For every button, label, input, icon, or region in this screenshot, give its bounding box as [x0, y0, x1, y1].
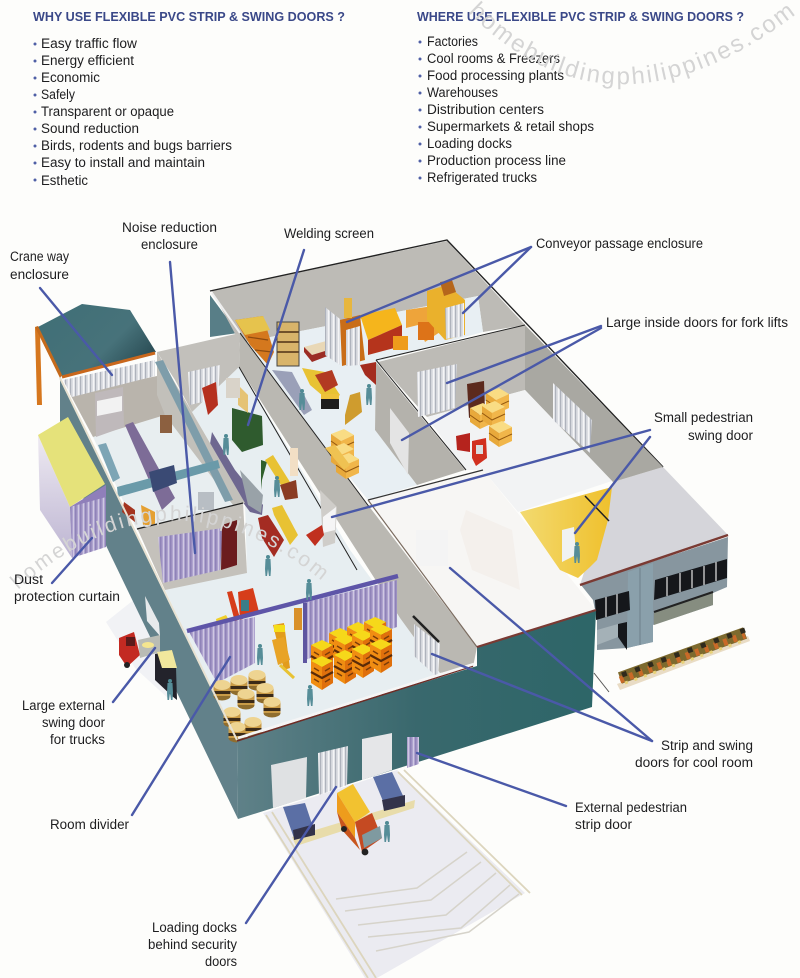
- callout: dust protection curtain: Dust: [14, 572, 43, 587]
- crane room floor: [93, 415, 235, 530]
- front wall: [237, 610, 596, 819]
- callout: small pedestrian swing door: swing door: [688, 428, 753, 443]
- curtain: inner room side: [553, 383, 592, 453]
- crane way strip curtain: [63, 360, 155, 397]
- callout: conveyor passage enclosure: [347, 236, 703, 322]
- long wall: [239, 333, 477, 673]
- callout: large inside doors: [402, 315, 788, 440]
- callout: large external swing door: [22, 648, 155, 747]
- security door 3: [362, 733, 392, 780]
- list: where use: Refrigerated trucks: [427, 170, 537, 185]
- door in enclosure: [221, 520, 237, 570]
- pavement line by office: [594, 673, 609, 692]
- callout: small pedestrian swing door: Small pedestrian: [654, 410, 753, 425]
- callout: large external swing door: for trucks: [50, 732, 105, 747]
- list: where use: Distribution centers: [427, 102, 544, 117]
- crane room back wall and divider: [70, 352, 245, 505]
- callout: strip and swing doors for cool room: doors for cool room: [635, 755, 753, 770]
- crane way roof: [35, 304, 156, 405]
- list: why use: Easy to install and maintain: [41, 155, 205, 170]
- icon: pallet rack: [235, 316, 274, 365]
- icon: pedestrian swing door: [320, 490, 337, 547]
- crane bridge and machines: [98, 415, 220, 525]
- callout: loading docks: [148, 787, 336, 969]
- callout: external pedestrian strip door: External pedestrian: [575, 800, 687, 815]
- curtain: inner room back: [417, 364, 457, 417]
- list: where use: Cool rooms & Freezers: [427, 51, 560, 66]
- icon: rack and crates in inner room: [467, 381, 512, 447]
- shed: [38, 417, 106, 558]
- watermarks: [9, 0, 795, 589]
- welding screen and machines: [202, 378, 298, 515]
- list: why use: Safely: [41, 87, 75, 102]
- callout: dust protection curtain: [14, 538, 120, 604]
- floor items: central hall: [258, 505, 324, 576]
- icon: dock levellers: [283, 772, 405, 840]
- icon: cool room side strip door: [413, 616, 440, 678]
- curtain: noise reduction enclosure: [158, 528, 223, 583]
- callout: large external swing door: swing door: [42, 715, 105, 730]
- strip door 2: [318, 746, 348, 795]
- curtain: welding hall back: [188, 365, 220, 405]
- callout: loading docks: doors: [205, 954, 237, 969]
- icon: storage rack: [277, 322, 299, 366]
- workers: front hall: [257, 579, 313, 706]
- callout: noise reduction enclosure: enclosure: [141, 237, 198, 252]
- list: where use: Loading docks: [427, 136, 512, 151]
- forklift: yellow: [272, 623, 294, 678]
- curtain: dust protection: [70, 497, 106, 558]
- yellow room: [520, 487, 612, 578]
- callout: strip and swing doors for cool room: [432, 568, 753, 770]
- icon: door on left wall: [145, 596, 160, 636]
- list: why use: Birds, rodents and bugs barriers: [41, 138, 232, 153]
- list: why use: Sound reduction: [41, 121, 139, 136]
- list: why use: Transparent or opaque: [41, 104, 174, 119]
- left outer wall: [60, 378, 238, 819]
- heading: why use: WHY USE FLEXIBLE PVC STRIP & SWING DOORS ?: [33, 10, 345, 24]
- heading: where use: WHERE USE FLEXIBLE PVC STRIP & SWING DOORS ?: [417, 10, 744, 24]
- callout: external pedestrian strip door: strip door: [575, 817, 633, 832]
- callout: welding screen: [248, 226, 374, 425]
- icon: red forklift: [456, 433, 487, 466]
- conveyor enclosure machines: [325, 280, 465, 366]
- list: where use: Warehouses: [427, 85, 498, 100]
- icon: delivery truck: [337, 784, 390, 855]
- crane room door: [95, 387, 124, 437]
- callout: crane way enclosure: [10, 249, 112, 375]
- security door 1: [271, 757, 307, 808]
- inner room with large doors: [375, 325, 663, 512]
- small rack: [294, 608, 302, 630]
- list: where use: Supermarkets & retail shops: [427, 119, 594, 134]
- callout: small pedestrian swing door: [332, 410, 753, 533]
- list: where use: Food processing plants: [427, 68, 564, 83]
- callout: conveyor passage enclosure: Conveyor passage enclosure: [536, 236, 703, 251]
- welding hall floor: [165, 367, 440, 740]
- floor machines: top room: [272, 362, 376, 479]
- callout: large inside doors: Large inside doors for fork lifts: [606, 315, 788, 330]
- callout: noise reduction enclosure: Noise reduction: [122, 220, 217, 235]
- callout: room divider: Room divider: [50, 817, 129, 832]
- callout: loading docks: behind security: [148, 937, 237, 952]
- callout: room divider: [50, 657, 230, 832]
- barrels: [214, 670, 280, 742]
- icon: work table: [304, 340, 338, 362]
- list: why use: Economic: [41, 70, 100, 85]
- office block: [580, 467, 728, 650]
- callout: large external swing door: Large external: [22, 698, 105, 713]
- loading dock yard: [263, 770, 530, 978]
- left wall top lip: [60, 378, 237, 740]
- callout: crane way enclosure: enclosure: [10, 267, 69, 282]
- icon: flower planter: [617, 630, 750, 690]
- cool room roof: [368, 470, 596, 647]
- list: where use: Factories: [427, 34, 478, 49]
- back wall of welding hall: [157, 333, 240, 412]
- list: why use: Energy efficient: [41, 53, 134, 68]
- callout: crane way enclosure: Crane way: [10, 249, 69, 264]
- shadow beside left wall: [106, 590, 180, 700]
- crane way beam: [62, 353, 155, 377]
- list: where use: [418, 34, 594, 185]
- external pedestrian strip door: [407, 737, 419, 768]
- callout: dust protection curtain: protection curtain: [14, 589, 120, 604]
- callout: welding screen: Welding screen: [284, 226, 374, 241]
- noise enclosure front wall: [137, 503, 247, 590]
- list: why use: [34, 36, 232, 188]
- watermarks: homebuildingphilippines.com: [9, 505, 326, 589]
- orange crate stacks: [311, 617, 392, 690]
- forklift: red in front hall: [216, 588, 259, 625]
- icon: truck at side door: [119, 632, 177, 700]
- front wall top lip: [237, 666, 473, 741]
- callout: noise reduction enclosure: [122, 220, 217, 553]
- callout: loading docks: Loading docks: [152, 920, 237, 935]
- top room: wall, floor: [210, 240, 663, 500]
- callout: strip and swing doors for cool room: Strip and swing: [661, 738, 753, 753]
- list: why use: Esthetic: [41, 173, 88, 188]
- list: where use: Production process line: [427, 153, 566, 168]
- list: why use: Easy traffic flow: [41, 36, 137, 51]
- callout: external pedestrian strip door: [417, 753, 687, 832]
- divider curtains: [187, 576, 398, 683]
